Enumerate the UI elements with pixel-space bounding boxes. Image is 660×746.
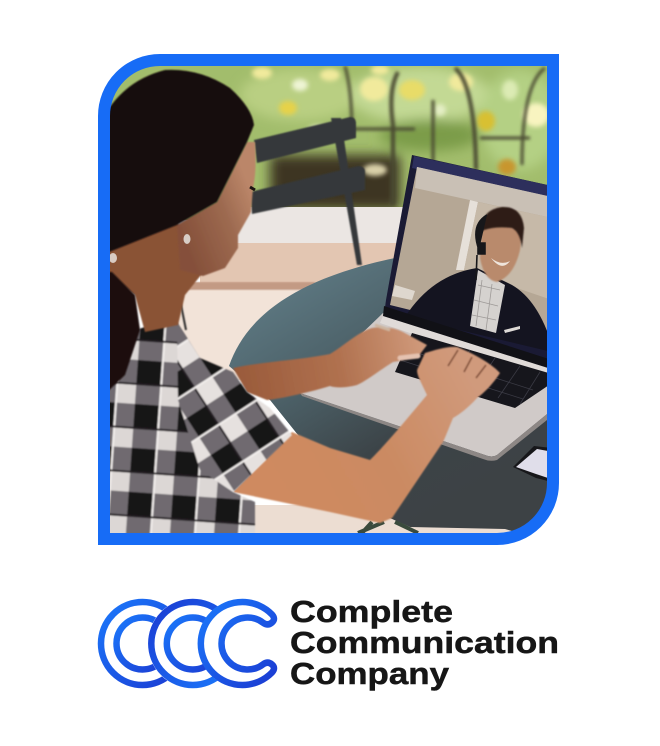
man's neck and face bbox=[480, 226, 522, 283]
blue rounded photo frame bbox=[104, 60, 553, 539]
keyboard bbox=[395, 333, 552, 408]
man's shirt bbox=[470, 270, 505, 333]
laptop base bbox=[300, 313, 552, 461]
infographic canvas bbox=[98, 54, 559, 691]
man's suit bbox=[405, 268, 552, 352]
man's smile bbox=[491, 258, 510, 266]
company name wordmark bbox=[290, 594, 559, 691]
woman's shirt bbox=[104, 322, 292, 539]
hair tie bbox=[110, 253, 117, 263]
photo background: wall and floor bbox=[170, 207, 540, 539]
man's hair bbox=[482, 207, 524, 248]
woman's neck bbox=[104, 222, 205, 332]
office background in video bbox=[390, 167, 547, 331]
woman's hair bbox=[104, 70, 254, 254]
photo: woman on a video call with a man on her laptop bbox=[104, 60, 560, 545]
eye lashes bbox=[250, 187, 255, 190]
earring bbox=[184, 234, 190, 244]
round table bbox=[229, 258, 560, 545]
first C bbox=[101, 602, 184, 685]
line 2: Communication bbox=[290, 625, 559, 660]
woman's face bbox=[177, 142, 256, 276]
line 3: Company bbox=[290, 656, 450, 691]
logo: three interlocking C rings bbox=[101, 598, 288, 688]
smartphone bbox=[513, 446, 547, 481]
table legs bbox=[358, 522, 418, 533]
hair tail bbox=[110, 271, 141, 390]
chair bbox=[180, 117, 365, 330]
laptop screen with man on video call bbox=[383, 155, 552, 368]
woman's left arm and hand bbox=[233, 347, 500, 523]
third C bbox=[198, 598, 288, 688]
line 1: Complete bbox=[290, 594, 453, 629]
headset bbox=[476, 215, 487, 280]
woman's right arm and hand bbox=[233, 325, 427, 400]
second C bbox=[148, 598, 238, 688]
pocket square bbox=[504, 326, 520, 333]
photo background: garden foliage bbox=[104, 60, 560, 220]
bottom bezel bbox=[383, 306, 552, 368]
